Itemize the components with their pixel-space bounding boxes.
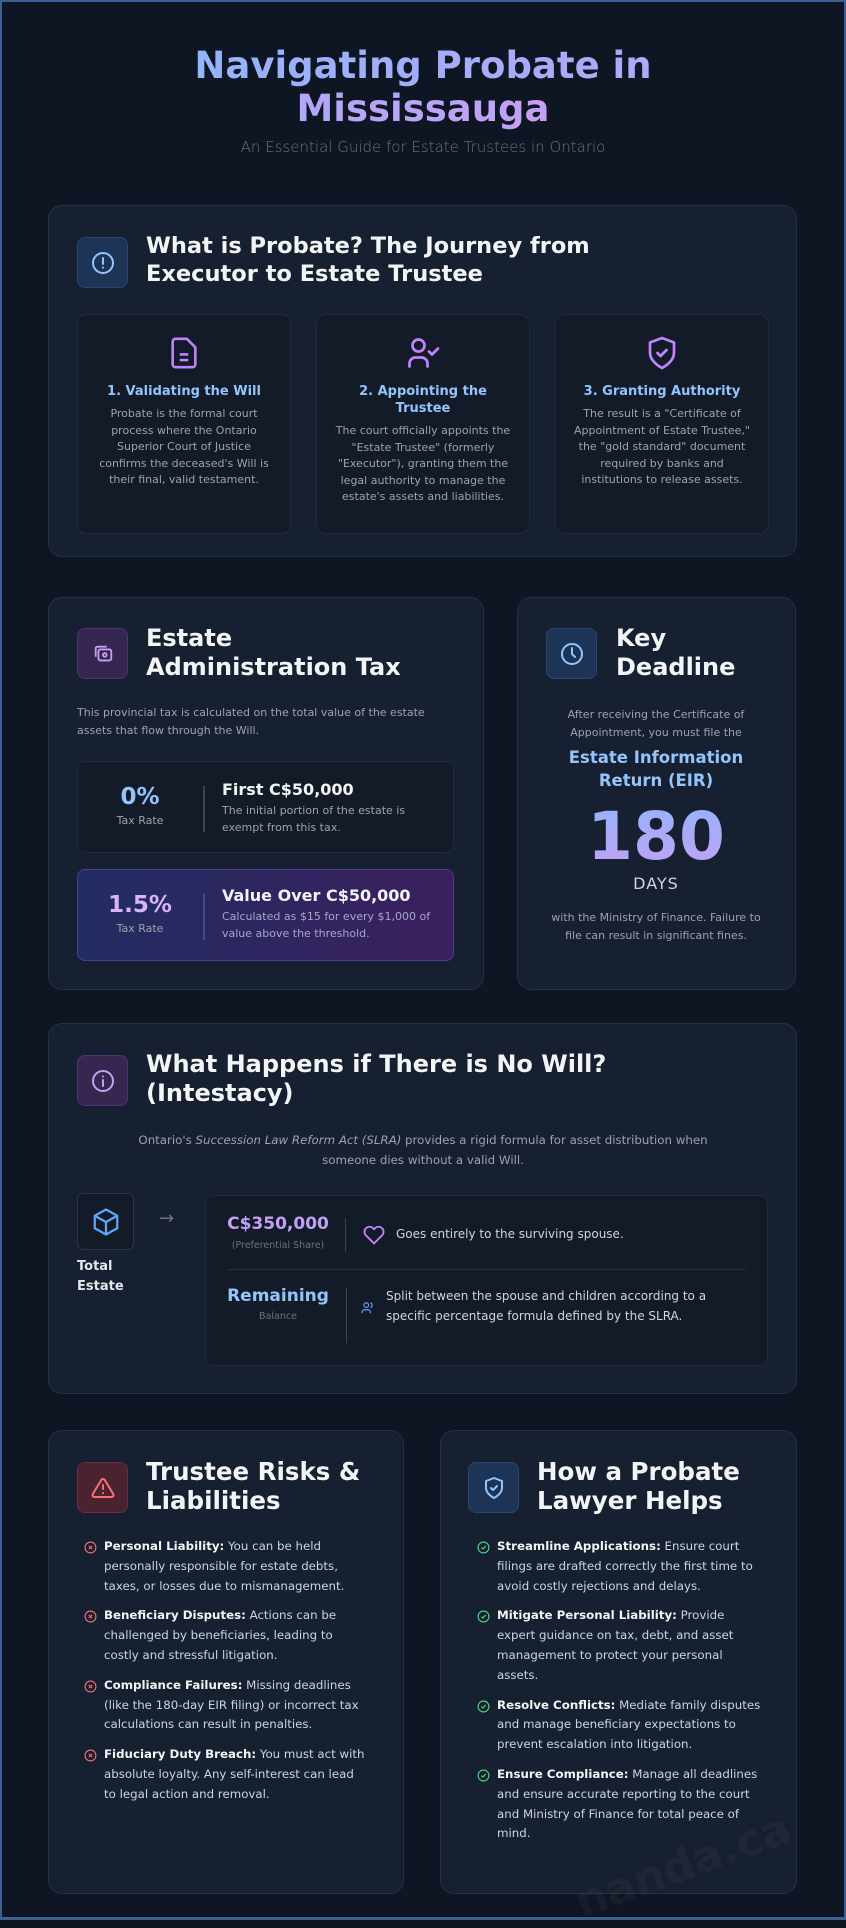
deadline content: After receiving the Certificate of Appointment, you must file the: [568, 708, 744, 739]
list: lawyer help: [478, 1539, 760, 1840]
heading: what is probate: [146, 233, 590, 287]
tax row: 1.5%: Calculated as $15 for every $1,000 of value above the threshold.: [222, 910, 430, 940]
list: risks: Fiduciary Duty Breach: You must act with absolute loyalty. Any self-interest can lead to legal action and removal.: [104, 1747, 365, 1801]
list: risks: [84, 1539, 365, 1801]
heading: tax: [146, 624, 401, 681]
panel: trustee risks: [48, 1430, 404, 1894]
arrow: →: [159, 1208, 174, 1229]
heading: deadline: Key: [616, 624, 666, 652]
panel: key deadline: [517, 597, 796, 990]
icon: alert: [77, 237, 128, 288]
tax row: 1.5%: Value Over C$50,000: [222, 886, 411, 905]
icon: total estate: [77, 1193, 134, 1250]
card: granting: 3. Granting Authority: [584, 384, 740, 399]
card: granting: [555, 314, 769, 534]
icon: warning: [77, 1462, 128, 1513]
panel: what is probate: [48, 205, 797, 557]
tax row: 0%: 0%: [120, 784, 160, 810]
tax row: 1.5%: Tax Rate: [117, 922, 163, 935]
title: Navigating Probate in: [194, 44, 652, 87]
deadline content: DAYS: [633, 874, 679, 893]
distribution box: C$350,000: [227, 1214, 329, 1234]
heading: deadline: Deadline: [616, 653, 735, 681]
tax row: 0%: The initial portion of the estate is exempt from this tax.: [222, 804, 405, 834]
distribution box: Split between the spouse and children according to a specific percentage formula defined by the SLRA.: [386, 1289, 706, 1323]
distribution box: Goes entirely to the surviving spouse.: [396, 1227, 624, 1241]
deadline content: Estate Information: [569, 748, 743, 767]
watermark: nanda.ca: [568, 1803, 798, 1928]
label: total estate: Total: [77, 1259, 113, 1274]
tax row: 0%: Tax Rate: [117, 814, 163, 827]
tax row: 1.5%: [77, 869, 454, 961]
heading: risks: Liabilities: [146, 1486, 281, 1515]
subtitle: An Essential Guide for Estate Trustees in Ontario: [241, 138, 605, 156]
distribution box: [205, 1195, 768, 1366]
heading: tax: Estate: [146, 624, 232, 652]
heading: deadline: [616, 624, 735, 681]
card: appointing: Trustee: [396, 401, 450, 416]
distribution box: Balance: [259, 1311, 297, 1322]
heading: lawyer: Lawyer Helps: [537, 1486, 723, 1515]
heading: what is probate: Executor to Estate Trustee: [146, 261, 483, 287]
card: appointing: The court officially appoints the "Estate Trustee" (formerly "Executor"), granting them the legal authority to manage the estate's assets and liabilities.: [336, 424, 510, 503]
card: granting: The result is a "Certificate of Appointment of Estate Trustee," the "gold standard" document required by banks and institutions to release assets.: [574, 407, 750, 486]
label: total estate: Estate: [77, 1279, 124, 1294]
card: validating: 1. Validating the Will: [107, 384, 261, 399]
tax row: 1.5%: 1.5%: [108, 892, 172, 918]
text: SLRA description: Ontario's Succession Law Reform Act (SLRA) provides a rigid formula for asset distribution when someone dies without a valid Will.: [138, 1133, 708, 1167]
distribution box: (Preferential Share): [232, 1240, 324, 1251]
heading: intestacy: (Intestacy): [146, 1079, 294, 1107]
text: tax description: This provincial tax is calculated on the total value of the estate assets that flow through the Will.: [77, 706, 425, 737]
list: risks: Personal Liability: You can be held personally responsible for estate debts, taxes, or losses due to mismanagement.: [104, 1539, 344, 1593]
panel: lawyer helps: [440, 1430, 797, 1894]
heading: intestacy: [146, 1050, 606, 1107]
heading: lawyer: [537, 1457, 740, 1515]
heading: tax: Administration Tax: [146, 653, 401, 681]
label: total estate: [77, 1259, 124, 1294]
title: [194, 44, 652, 130]
list: lawyer help: Ensure Compliance: Manage all deadlines and ensure accurate reporting to the court and Ministry of Finance for total peace of mind.: [497, 1767, 757, 1840]
deadline content: [551, 708, 761, 942]
heading: risks: [146, 1457, 360, 1515]
deadline content: 180: [587, 798, 725, 875]
tax row: 0%: First C$50,000: [222, 780, 354, 799]
tax row: 0%: [77, 761, 454, 853]
card: appointing: [316, 314, 530, 534]
list: risks: Beneficiary Disputes: Actions can be challenged by beneficiaries, leading to costly and stressful litigation.: [104, 1608, 336, 1662]
icon: info: [77, 1055, 128, 1106]
heading: lawyer: How a Probate: [537, 1457, 740, 1486]
deadline content: Return (EIR): [599, 771, 713, 790]
list: risks: Compliance Failures: Missing deadlines (like the 180-day EIR filing) or incorrect tax calculations can result in penalties.: [104, 1678, 359, 1731]
heading: risks: Trustee Risks &: [146, 1457, 360, 1486]
card: appointing: 2. Appointing the: [359, 384, 487, 399]
card: validating: [77, 314, 291, 534]
heading: what is probate: What is Probate? The Journey from: [146, 233, 590, 259]
panel: intestacy: [48, 1023, 797, 1394]
distribution box: Remaining: [227, 1286, 329, 1306]
panel: estate administration tax: [48, 597, 484, 990]
heading: intestacy: What Happens if There is No Will?: [146, 1050, 606, 1078]
icon: shield: [468, 1462, 519, 1513]
icon: clock: [546, 628, 597, 679]
icon: money: [77, 628, 128, 679]
list: lawyer help: Streamline Applications: Ensure court filings are drafted correctly the first time to avoid costly rejections and delays.: [497, 1539, 753, 1593]
title: Mississauga: [296, 87, 550, 130]
list: lawyer help: Resolve Conflicts: Mediate family disputes and manage beneficiary expectations to prevent escalation into litigation.: [497, 1698, 760, 1751]
list: lawyer help: Mitigate Personal Liability: Provide expert guidance on tax, debt, and asset management to protect your personal assets.: [497, 1608, 733, 1682]
card: validating: Probate is the formal court process where the Ontario Superior Court of Justice confirms the deceased's Will is their final, valid testament.: [99, 407, 269, 486]
deadline content: with the Ministry of Finance. Failure to file can result in significant fines.: [551, 911, 761, 942]
